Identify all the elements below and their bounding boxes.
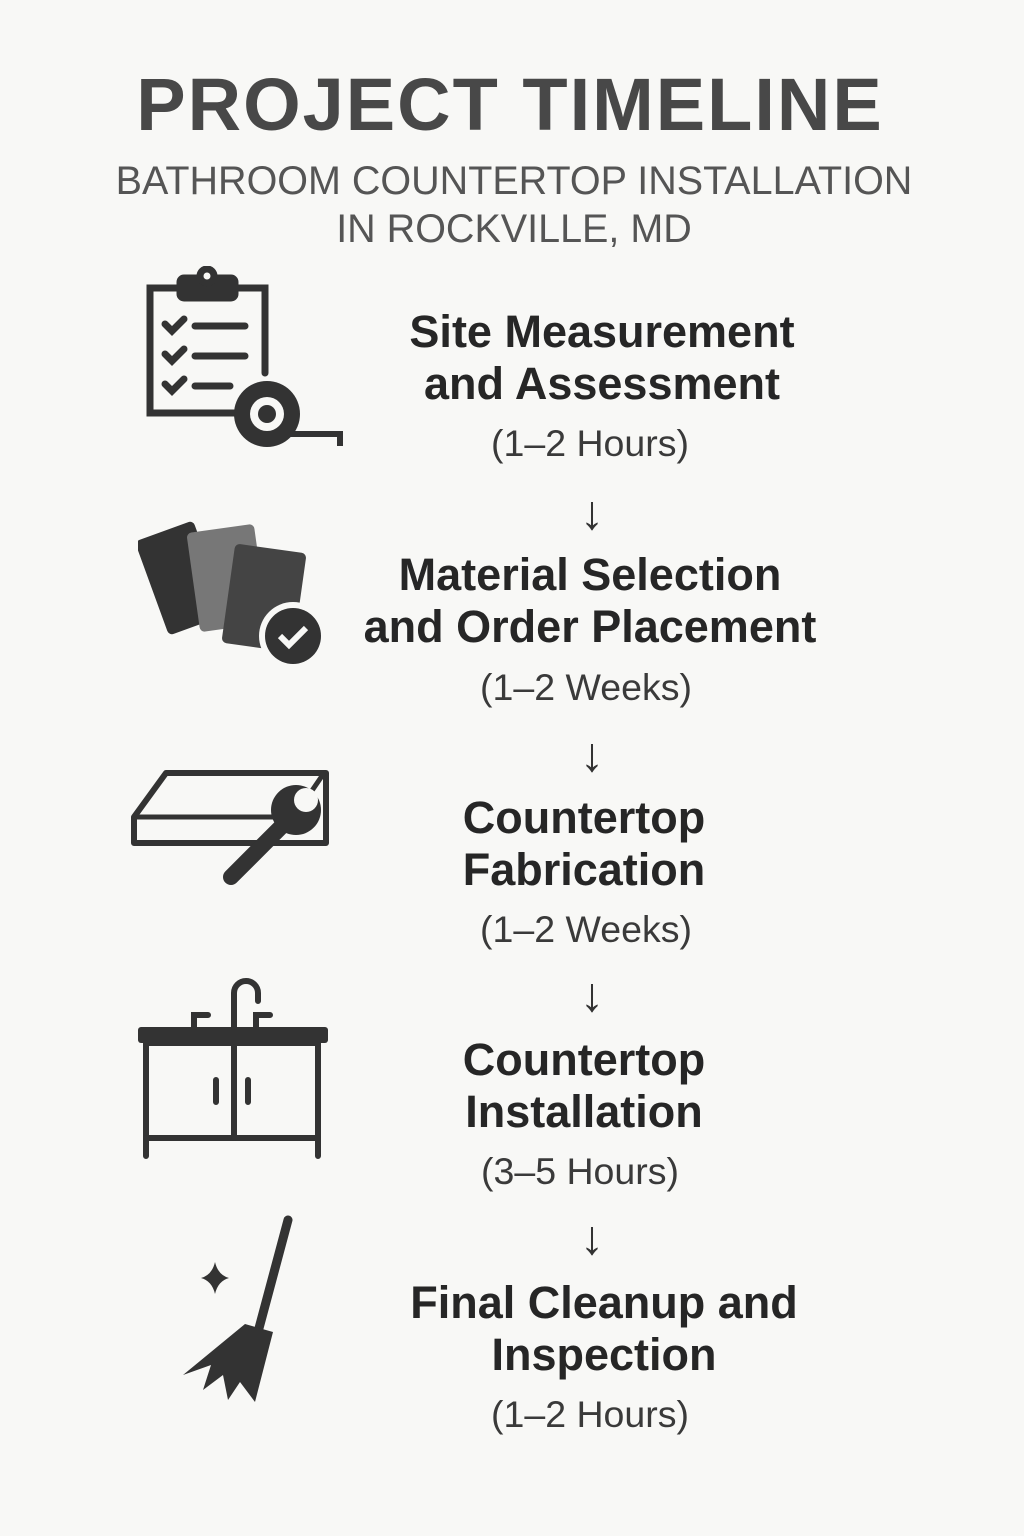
- arrow 3: ↓: [580, 969, 604, 1022]
- arrow 4: ↓: [580, 1212, 604, 1265]
- step 5 duration: (1–2 Hours): [491, 1393, 689, 1435]
- subtitle: BATHROOM COUNTERTOP INSTALLATION: [116, 159, 912, 203]
- icon: vanity with sink: [138, 978, 328, 1159]
- step 1 heading: and Assessment: [424, 358, 780, 409]
- step 1 heading: [409, 306, 795, 409]
- step 4 duration: (3–5 Hours): [481, 1150, 679, 1192]
- step 3 heading: Fabrication: [463, 844, 705, 895]
- step 3 heading: Countertop: [463, 792, 705, 843]
- icon: countertop with wrench: [131, 770, 329, 885]
- step 1: [409, 306, 795, 464]
- step 2 duration: (1–2 Weeks): [480, 666, 692, 708]
- step 2 heading: and Order Placement: [364, 601, 816, 652]
- step 2 heading: [364, 549, 816, 652]
- step 3 duration: (1–2 Weeks): [480, 908, 692, 950]
- arrow 1: ↓: [580, 487, 604, 540]
- subtitle: IN ROCKVILLE, MD: [336, 207, 692, 251]
- step 5 heading: Inspection: [491, 1329, 717, 1380]
- step 2: [364, 549, 816, 708]
- step 2 heading: Material Selection: [399, 549, 781, 600]
- step 4 heading: Installation: [465, 1086, 703, 1137]
- icon: broom with sparkle: [183, 1216, 292, 1402]
- subtitle: [116, 159, 912, 251]
- step 5: [410, 1277, 798, 1435]
- step 1 heading: Site Measurement: [409, 306, 795, 357]
- step 3: [463, 792, 705, 950]
- step 4 heading: Countertop: [463, 1034, 705, 1085]
- step 5 heading: [410, 1277, 798, 1380]
- icon: material samples: [138, 522, 321, 664]
- step 5 heading: Final Cleanup and: [410, 1277, 798, 1328]
- step 4: [463, 1034, 705, 1192]
- step 1 duration: (1–2 Hours): [491, 422, 689, 464]
- step 4 heading: [463, 1034, 705, 1137]
- step 3 heading: [463, 792, 705, 895]
- icon: clipboard with tape measure: [146, 266, 343, 447]
- title: PROJECT TIMELINE: [136, 63, 884, 146]
- arrow 2: ↓: [580, 729, 604, 782]
